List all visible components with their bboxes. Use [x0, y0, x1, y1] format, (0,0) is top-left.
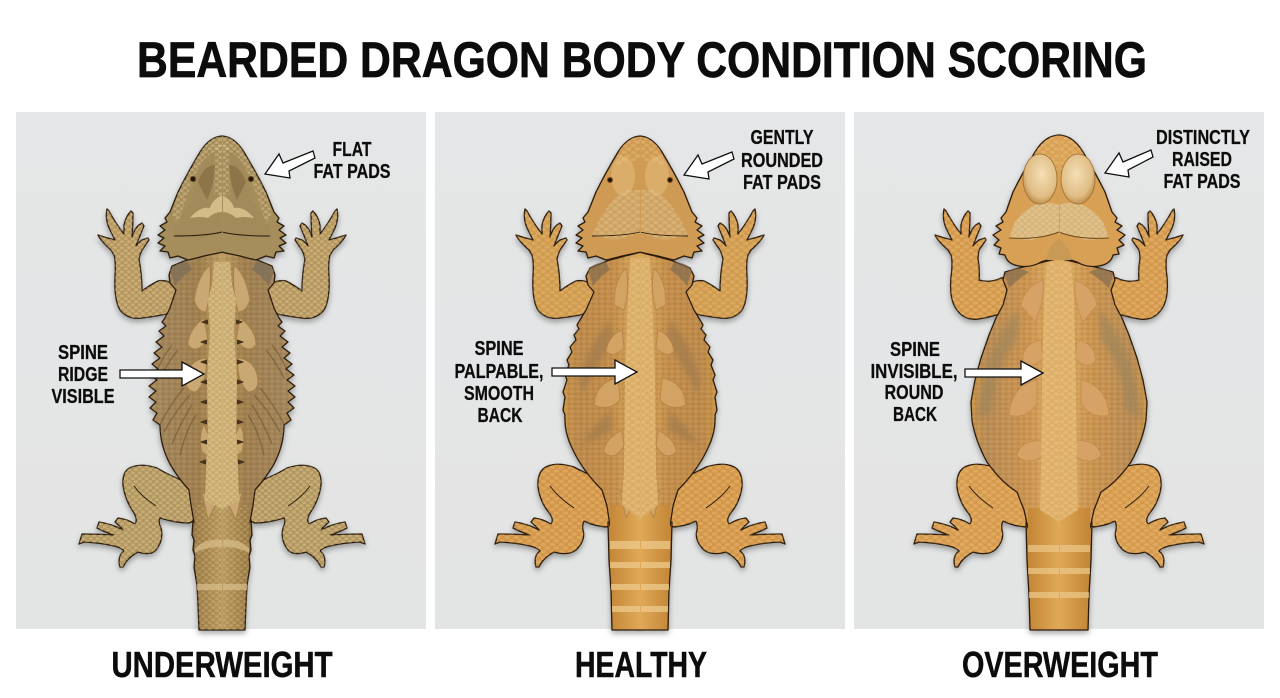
- callout: spine invisible, round back: ROUND: [884, 382, 944, 404]
- label: underweight: UNDERWEIGHT: [112, 644, 333, 685]
- callout: distinctly raised fat pads: DISTINCTLY: [1156, 127, 1251, 149]
- callout: spine invisible, round back: [870, 339, 1043, 426]
- callout: spine palpable, smooth back: [454, 338, 637, 427]
- callout: gently rounded fat pads: [684, 127, 823, 194]
- callout: spine invisible, round back: INVISIBLE,: [870, 361, 958, 383]
- callout: flat fat pads: FAT PADS: [314, 161, 390, 183]
- callout: gently rounded fat pads: ROUNDED: [741, 150, 823, 172]
- illustration: overweight bearded dragon: [914, 135, 1204, 630]
- callout: spine palpable, smooth back: SMOOTH: [464, 383, 534, 405]
- callout: spine ridge visible: [52, 342, 204, 408]
- panel: healthy: [435, 112, 845, 685]
- illustration: underweight bearded dragon: [79, 136, 365, 630]
- callout: spine invisible, round back: SPINE: [890, 339, 940, 361]
- callout: distinctly raised fat pads: [1105, 127, 1251, 193]
- callout: spine ridge visible: SPINE: [58, 342, 108, 364]
- callout: spine ridge visible: RIDGE: [58, 364, 108, 386]
- callout: flat fat pads: [265, 139, 390, 183]
- callout: spine palpable, smooth back: SPINE: [474, 338, 524, 360]
- icon: raised fat pad: [1061, 154, 1095, 204]
- callout: spine ridge visible: VISIBLE: [52, 386, 114, 408]
- callout: gently rounded fat pads: GENTLY: [750, 127, 814, 149]
- callout: distinctly raised fat pads: RAISED: [1172, 149, 1232, 171]
- panel: overweight: [854, 112, 1264, 685]
- callout: spine palpable, smooth back: BACK: [478, 405, 523, 427]
- callout: flat fat pads: FLAT: [332, 139, 372, 161]
- label: overweight: OVERWEIGHT: [962, 644, 1158, 685]
- callout: spine palpable, smooth back: PALPABLE,: [454, 361, 544, 383]
- callout: spine invisible, round back: BACK: [893, 404, 937, 426]
- callout: gently rounded fat pads: FAT PADS: [743, 172, 821, 194]
- panel: underweight: [16, 112, 426, 685]
- callout: distinctly raised fat pads: FAT PADS: [1164, 171, 1240, 193]
- illustration: healthy bearded dragon: [495, 136, 785, 630]
- label: healthy: HEALTHY: [575, 644, 707, 685]
